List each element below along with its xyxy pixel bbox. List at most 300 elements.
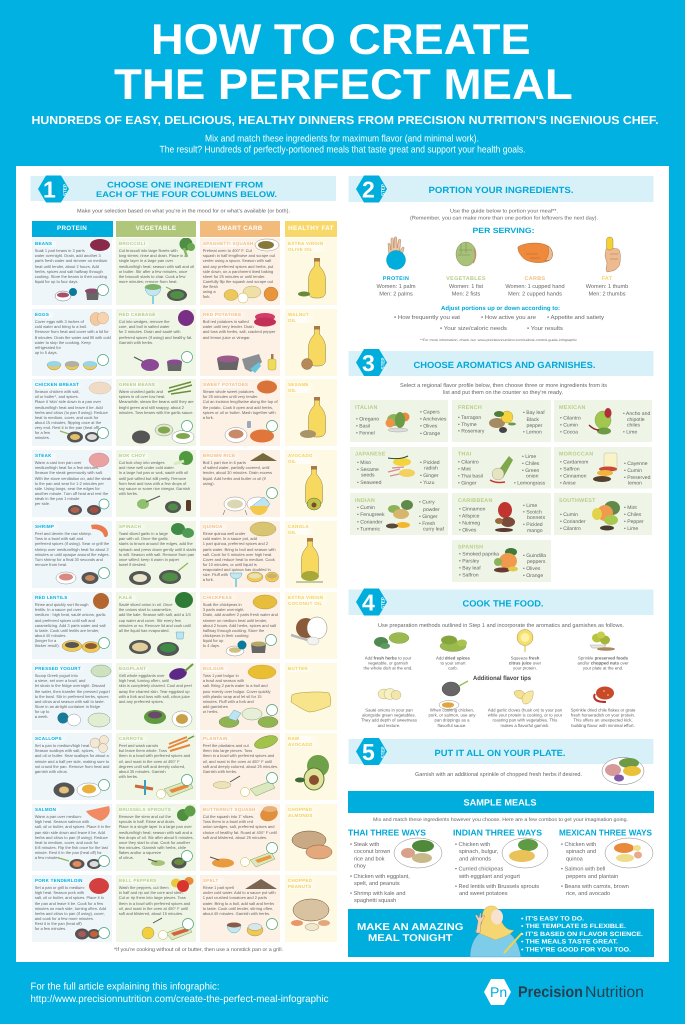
card: sesame oil bbox=[285, 379, 337, 446]
card: pork tenderloin: minutes on each side, turning often. Add bbox=[35, 906, 106, 911]
title bbox=[114, 16, 573, 109]
card: quinoa: Cover and reduce heat to medium. Cook bbox=[203, 557, 275, 562]
step 1 footnote: *If you're cooking without oil or butter, then use a nonstick pan or a grill. bbox=[114, 947, 283, 953]
card: steak: Season the steak generously with salt. bbox=[35, 470, 103, 475]
card: canola oil: OIL bbox=[288, 530, 296, 535]
meal column: Indian three ways: and sweet potatoes bbox=[459, 890, 508, 897]
title: HOW TO CREATE bbox=[151, 16, 531, 64]
column header: smart carb bbox=[200, 221, 280, 237]
step 5 header: PUT IT ALL ON YOUR PLATE. bbox=[434, 748, 566, 758]
card: beans: liquid for up to four days. bbox=[35, 279, 78, 284]
card: shrimp: Peel and devein the raw shrimp. bbox=[35, 531, 92, 536]
intro text: The result? Hundreds of perfectly-portioned meals that taste great and support your health goals. bbox=[160, 144, 526, 156]
flavor box: French: • Rosemary bbox=[458, 428, 485, 434]
column header: healthy fat bbox=[285, 221, 337, 237]
meal column: Indian three ways: • Chicken with bbox=[455, 841, 490, 848]
card: carrots bbox=[116, 733, 196, 800]
card: brussels sprouts: flakes and/or a squeeze bbox=[119, 850, 161, 855]
card: chicken breast: for a few bbox=[35, 430, 50, 435]
card: salmon: minute. Rest it in the pan (heat off) for bbox=[35, 850, 102, 855]
meal column: Thai three ways bbox=[348, 828, 442, 904]
flavor box: French: • Tarragon bbox=[458, 415, 481, 421]
card: red potatoes: and lemon juice or vinegar. bbox=[203, 335, 250, 340]
flavor box: Southwest: SOUTHWEST bbox=[559, 498, 596, 504]
serving amounts: Men: 2 thumbs bbox=[588, 290, 626, 298]
tip: garlic: while your protein is cooking, or to your bbox=[488, 712, 563, 717]
card: plantain: them in a bowl with preferred spices and bbox=[203, 753, 274, 758]
card: quinoa: parts water. Bring to boil and season with bbox=[203, 547, 276, 552]
flavor box: Moroccan: • Cinnamon bbox=[560, 474, 587, 480]
flavor box: Thai bbox=[452, 447, 551, 488]
card: steak: medium/high heat for a few minutes. bbox=[35, 465, 99, 470]
card: red potatoes: RED POTATOES bbox=[203, 312, 241, 317]
meal column: Thai three ways: • Shrimp with kale and bbox=[350, 890, 405, 897]
serving amounts: Women: 1 cupped hand bbox=[505, 283, 565, 290]
card: eggs: refrigerated for bbox=[35, 345, 61, 350]
flavor box: Indian bbox=[350, 493, 448, 535]
flavor box: Thai: THAI bbox=[458, 452, 472, 458]
icon: thumb fat bbox=[605, 237, 620, 272]
step 3 header: STEP bbox=[380, 358, 386, 370]
card: plantain: oil, and roast in the oven at 400° F until bbox=[203, 759, 272, 764]
card: brussels sprouts: few minutes. Garnish with herbs, chile bbox=[119, 845, 186, 850]
card: chickpeas: simmer on medium heat until tender, bbox=[203, 618, 267, 623]
sample meals banner: SAMPLE MEALS bbox=[464, 798, 536, 808]
flavor box: Japanese: JAPANESE bbox=[355, 452, 386, 458]
flavor box: Moroccan bbox=[554, 447, 652, 488]
card: raw avocado: RAW bbox=[288, 736, 299, 741]
card: spelt: SPELT bbox=[203, 878, 219, 883]
card: green beans: Meanwhile, steam the beans until they are bbox=[119, 399, 194, 404]
step 4 header: STEP bbox=[380, 597, 386, 609]
meal column: Thai three ways: spaghetti squash bbox=[354, 897, 396, 904]
card: quinoa: Rinse quinoa well under bbox=[203, 531, 245, 536]
card: red lentils: and preferred spices until soft and bbox=[35, 618, 95, 623]
card: eggplant: high heat, turning often, until bbox=[119, 678, 169, 683]
flavor box: French: Black bbox=[526, 417, 539, 423]
icon: citrus bbox=[517, 630, 533, 652]
column header: healthy fat: HEALTHY FAT bbox=[288, 225, 334, 232]
card: chickpeas: Soak the chickpeas in bbox=[203, 602, 242, 607]
card: butternut squash: choice of healthy fat. Roast at 400° F until bbox=[203, 830, 277, 835]
serving amounts: Men: 2 fists bbox=[452, 290, 480, 298]
card: carrots: degrees until soft and deeply colored, bbox=[119, 764, 185, 769]
card: green beans: spices in oil over low heat. bbox=[119, 394, 165, 399]
flavor box: Caribbean: • Nutmeg bbox=[459, 520, 480, 526]
card: green beans: minutes. Toss beans with the garlic sauce. bbox=[119, 410, 194, 415]
step 2 header: STEP bbox=[380, 184, 386, 196]
card: quinoa: QUINOA bbox=[203, 524, 223, 529]
column header: protein: PROTEIN bbox=[57, 225, 87, 232]
sample meals banner bbox=[348, 791, 654, 813]
card: brown rice bbox=[200, 450, 280, 517]
card: brown rice: liquid. Add herbs and butter or oil (if bbox=[203, 476, 266, 481]
card: plantain: Peel the plantains and cut bbox=[203, 743, 249, 748]
card: broccoli bbox=[116, 238, 196, 305]
card: bell peppers: soft and blistered, about 15 minutes. bbox=[119, 911, 183, 916]
card: kale: add the kale. Season with salt, add a 1/4 bbox=[119, 612, 191, 617]
card: shrimp: Toss in a bowl with salt and bbox=[35, 536, 83, 541]
card: bell peppers: Cut or rip them into large pieces. Toss bbox=[119, 895, 186, 900]
card: spinach: Toast sliced garlic in a large bbox=[119, 531, 168, 536]
card: red potatoes: water until very tender. Drain bbox=[203, 324, 254, 329]
card: scallops: SCALLOPS bbox=[35, 736, 62, 741]
card: plantain: them into large pieces. Toss bbox=[203, 748, 252, 753]
tip: onions: They add depth of sweetness bbox=[361, 718, 417, 722]
card: scallops bbox=[32, 733, 112, 800]
flavor box: Italian: • Olives bbox=[420, 424, 438, 430]
card: shrimp: shrimp over medium/high heat for about 2 bbox=[35, 547, 109, 552]
card: carrots: but leave them whole. Toss bbox=[119, 748, 167, 753]
card: plantain bbox=[200, 733, 280, 800]
card: carrots: them in a bowl with preferred spices and bbox=[119, 753, 190, 758]
flavor box: Mexican: • Lime bbox=[623, 430, 637, 436]
tip: fresh herbs: the whole dish at the end. bbox=[364, 665, 412, 670]
flavor box: Moroccan: MOROCCAN bbox=[559, 452, 593, 458]
card: quinoa: salt. Cook for 5 minutes over high heat. bbox=[203, 552, 272, 557]
flavor box: Indian: • Coriander bbox=[357, 520, 383, 526]
card: canola oil: CANOLA bbox=[288, 524, 309, 529]
adjust portions list: • Appetite and satiety bbox=[547, 314, 604, 321]
card: chicken breast: oil or butter*, and spices. bbox=[35, 394, 79, 399]
serving labels bbox=[383, 276, 613, 282]
adjust portions list: • How active you are bbox=[481, 314, 536, 321]
card: carrots: oil, and roast in the oven at 400° F bbox=[119, 759, 180, 764]
card: chickpeas: halfway through cooking. Store the bbox=[203, 628, 264, 633]
card: spelt: Rinse 1 part spelt bbox=[203, 885, 234, 890]
flavor box: Indian: • Ginger bbox=[419, 514, 438, 520]
step 2 header: PORTION YOUR INGREDIENTS. bbox=[428, 185, 574, 195]
card: pressed yogurt: for up to bbox=[35, 709, 49, 714]
card: bulgur bbox=[200, 663, 280, 730]
card: beans: Soak 1 part beans in 3 parts bbox=[35, 248, 85, 253]
card: pressed yogurt: to the bowl. Stir in preferred herbs, spices bbox=[35, 694, 108, 699]
card: carrots: Peel and wash carrots bbox=[119, 743, 158, 748]
card: plantain: soft and deeply colored, about 25 minutes. bbox=[203, 764, 278, 769]
flavor box: Italian: • Anchovies bbox=[420, 416, 447, 422]
card: brussels sprouts: of citrus. bbox=[119, 855, 134, 860]
tip: citrus juice: your protein. bbox=[513, 665, 537, 670]
flavor box: French: FRENCH bbox=[458, 405, 482, 411]
flavor box: Spanish: SPANISH bbox=[458, 544, 483, 550]
meal column: Indian three ways: with eggplant and yogurt bbox=[458, 873, 520, 880]
card: sweet potatoes: Steam whole sweet potatoes bbox=[203, 389, 254, 394]
card: brown rice: using). bbox=[203, 481, 215, 486]
step 3 intro text: list and put them on the counter so they're ready. bbox=[443, 390, 563, 396]
card: spelt: water. Bring to a boil, add salt and herbs bbox=[203, 901, 274, 906]
card: bok choy: from heat and toss with a few drops of bbox=[119, 481, 186, 486]
card: quinoa bbox=[200, 521, 280, 588]
flavor box: French: pepper bbox=[526, 423, 543, 429]
flavor box: Southwest: • Coriander bbox=[560, 519, 586, 525]
card: chopped almonds: CHOPPED bbox=[288, 807, 312, 812]
card: chicken breast: medium/high heat and leave it be. Add bbox=[35, 405, 103, 410]
card: plantain: Garnish with herbs. bbox=[203, 769, 237, 774]
step 3 intro text: Select a regional flavor profile below, then choose three or more ingredients from its bbox=[400, 383, 607, 389]
card: spelt bbox=[200, 875, 280, 942]
card: pork tenderloin: and cook for a few more minutes. bbox=[35, 916, 94, 921]
card: bok choy: until just wilted but still pretty. Remove bbox=[119, 476, 186, 481]
serving amounts: Men: 2 palms bbox=[379, 290, 413, 298]
flavor box: French: • Thyme bbox=[458, 422, 477, 428]
tip: onions: and texture. bbox=[378, 723, 400, 728]
card: brown rice: BROWN RICE bbox=[203, 453, 235, 458]
card: butternut squash: onion wedges, salt, preferred spices and bbox=[203, 824, 275, 829]
card: butternut squash: Toss them in a bowl with red bbox=[203, 819, 253, 824]
white content panel bbox=[16, 166, 669, 962]
call to action reasons: • IT'S BASED ON FLAVOR SCIENCE. bbox=[521, 931, 643, 938]
card: brussels sprouts: sprouts in half. Rinse and drain. bbox=[119, 819, 175, 824]
card: bulgur: add garnishes bbox=[203, 704, 228, 709]
step 3 header: CHOOSE AROMATICS AND GARNISHES. bbox=[414, 360, 596, 370]
step 2 header bbox=[348, 176, 654, 202]
card: scallops: garnish with citrus. bbox=[35, 769, 68, 774]
flavor box: Japanese: • Sesame bbox=[357, 467, 379, 473]
tip: fresh herbs: vegetable, or garnish bbox=[368, 660, 409, 665]
card: sweet potatoes bbox=[200, 379, 280, 446]
illustration: woman with pen bbox=[470, 906, 522, 957]
panel: sample meals bbox=[348, 791, 654, 904]
card: bell peppers: oil, and roast in the oven at 400° F until bbox=[119, 906, 188, 911]
serving labels: VEGETABLES bbox=[446, 276, 486, 282]
flavor box: French: • Lemon bbox=[523, 430, 542, 436]
flavor box: French bbox=[452, 400, 551, 442]
flavor box: Japanese: seeds bbox=[361, 472, 375, 478]
card: red cabbage: Garnish with herbs. bbox=[119, 340, 153, 345]
card: broccoli: BROCCOLI bbox=[119, 241, 145, 246]
card: bulgur: Toss 1 part bulgur in bbox=[203, 673, 239, 678]
flavor box: Japanese: • Miso bbox=[357, 460, 371, 466]
card: eggs: EGGS bbox=[35, 312, 49, 317]
card: red potatoes: and toss with herbs, salt, cracked pepper bbox=[203, 329, 275, 334]
card: extra virgin coconut oil: EXTRA VIRGIN bbox=[288, 595, 323, 600]
flavor box: Mexican: chipotle bbox=[627, 417, 645, 423]
card: pressed yogurt: the water, then transfer the pressed yogurt bbox=[35, 689, 110, 694]
card: pork tenderloin: Set a pan or grill to medium- bbox=[35, 885, 85, 890]
flavor box: Spanish: peppers bbox=[527, 559, 546, 565]
flavor box: Caribbean: bonnets bbox=[527, 515, 546, 521]
card: spelt: about 40 minutes. Garnish with herbs. bbox=[203, 911, 270, 916]
flavor box: Moroccan: • Cardamom bbox=[560, 460, 588, 466]
card: chopped almonds bbox=[285, 804, 337, 871]
card: beans: herbs, spices and salt halfway through bbox=[35, 269, 103, 274]
tip: fresh herbs: Add fresh herbs to your bbox=[365, 655, 411, 660]
flavor box: Indian: curry leaf bbox=[423, 526, 445, 532]
step 5 header: 5 bbox=[362, 739, 375, 765]
subtitle: HUNDREDS OF EASY, DELICIOUS, HEALTHY DINNERS FROM PRECISION NUTRITION'S INGENIOUS CHEF. bbox=[32, 114, 658, 127]
flavor box: Caribbean: mango bbox=[527, 528, 543, 534]
card: salmon: herbs and citrus to pan (if using). Reduce bbox=[35, 835, 108, 840]
title: THE PERFECT MEAL bbox=[114, 61, 573, 109]
flavor box: Indian: • Turmeric bbox=[357, 526, 380, 532]
card: green beans: bright green and still snappy, about 2 bbox=[119, 405, 184, 410]
card: brussels sprouts: few drops of oil. Stir after about 5 minutes, bbox=[119, 835, 194, 840]
flavor box: Mexican: MEXICAN bbox=[559, 405, 586, 411]
flavor box: Spanish: • Guindilla bbox=[523, 553, 546, 559]
additional flavor tips heading: Additional flavor tips bbox=[473, 675, 532, 682]
card: steak: per side. bbox=[35, 501, 50, 506]
footer article link: http://www.precisionnutrition.com/create-the-perfect-meal-infographic bbox=[30, 994, 328, 1005]
card: quinoa: for 10 minutes, or until liquid is bbox=[203, 562, 257, 567]
card: brussels sprouts: Remove the stem and cut the bbox=[119, 814, 171, 819]
flavor box: Thai: • Lime bbox=[522, 454, 536, 460]
call to action reasons: • THE MEALS TASTE GREAT. bbox=[521, 938, 618, 946]
flavor box: Thai: onion bbox=[526, 474, 539, 480]
icon: garlic bbox=[514, 690, 533, 704]
card: red cabbage: core, and boil in salted water bbox=[119, 324, 170, 329]
tip: pan sauce: pork, or salmon, use any bbox=[428, 712, 476, 717]
card: chopped almonds: ALMONDS bbox=[288, 813, 313, 818]
card: eggplant: Grill whole eggplants over bbox=[119, 673, 165, 678]
meal column: Indian three ways: INDIAN THREE WAYS bbox=[453, 828, 542, 838]
card: spinach: to wilt. Season with salt. Remove from pan bbox=[119, 552, 194, 557]
card: sweet potatoes: SWEET POTATOES bbox=[203, 382, 248, 387]
card: salmon: 6-8 minutes. Flip the fish once for the last bbox=[35, 845, 108, 850]
tip: garlic: Add garlic cloves (husk on) to your pan bbox=[488, 707, 563, 712]
card: spinach: spinach and press down gently until it starts bbox=[119, 547, 196, 552]
flavor box: Thai: • Ginger bbox=[458, 480, 477, 486]
card: pressed yogurt: PRESSED YOGURT bbox=[35, 666, 81, 671]
tip: onions: Sauté onions in your pan bbox=[365, 707, 413, 712]
card: walnut oil: WALNUT bbox=[288, 312, 309, 317]
card: butter: BUTTER bbox=[288, 666, 308, 671]
card: chicken breast: very end. Rest it in the pan (heat off) bbox=[35, 425, 99, 430]
card: broccoli: more minutes; remove from heat. bbox=[119, 279, 178, 284]
flavor box: Spanish: • Smoked paprika bbox=[459, 552, 499, 558]
card: pressed yogurt: Store in an airtight container in fridge bbox=[35, 704, 100, 709]
card: red lentils: medium - high heat, sauté onions, garlic bbox=[35, 612, 106, 617]
card: carrots: about 35 minutes. Garnish bbox=[119, 769, 166, 774]
card: spelt: to taste. Cook until tender, stirring often, bbox=[203, 906, 273, 911]
step 4 intro text: Use preparation methods outlined in Step 1 and incorporate the aromatics and garnishes as follows. bbox=[378, 623, 624, 629]
meal column: Thai three ways: choy bbox=[354, 862, 366, 870]
column header: smart carb: SMART CARB bbox=[217, 225, 263, 232]
flavor box: Japanese: • Yuzu bbox=[420, 480, 435, 486]
per serving heading: PER SERVING: bbox=[472, 226, 534, 235]
card: spaghetti squash: center using a spoon. Season with salt bbox=[203, 258, 271, 263]
flavor box: Mexican bbox=[554, 400, 652, 442]
meal column: Thai three ways: • Steak with bbox=[350, 841, 379, 848]
step 1 header bbox=[30, 176, 336, 202]
flavor box: Italian: • Fennel bbox=[356, 430, 375, 436]
flavor box: Indian: • Curry bbox=[419, 500, 435, 506]
card: bulgur: a bowl and season with bbox=[203, 678, 244, 683]
card: extra virgin olive oil bbox=[285, 238, 337, 305]
flavor box: Mexican: • Cocoa bbox=[560, 430, 578, 436]
card: shrimp bbox=[32, 521, 112, 588]
card: bulgur: BULGUR bbox=[203, 666, 224, 671]
card: kale: all the liquid has evaporated. bbox=[119, 628, 170, 633]
card: red cabbage: Cut into wedges, remove the bbox=[119, 319, 170, 324]
flavor box: Italian: • Oregano bbox=[356, 416, 379, 422]
card: salmon bbox=[32, 804, 112, 871]
adjust portions list bbox=[394, 305, 604, 332]
tip: onions: alongside green vegetables. bbox=[362, 712, 416, 717]
card: broccoli: Cut broccoli into large florets with bbox=[119, 248, 178, 253]
card: sesame oil: SESAME bbox=[288, 382, 309, 387]
card: red lentils: about 40 minutes. bbox=[35, 633, 66, 638]
flavor box: Italian: ITALIAN bbox=[355, 405, 378, 411]
flavor box: Thai: • Mint bbox=[458, 466, 471, 472]
card: pork tenderloin: PORK TENDERLOIN bbox=[35, 878, 83, 883]
call to action reasons: • IT'S EASY TO DO. bbox=[521, 915, 584, 922]
card: spaghetti squash: fork. bbox=[203, 294, 210, 299]
icon: pan drippings bbox=[439, 681, 468, 710]
tip: garlic: makes a flavorful garnish. bbox=[501, 723, 549, 728]
sample meals intro: Mix and match these ingredients however you choose. Here are a few combos to get your imagination going. bbox=[373, 817, 628, 823]
card: red lentils: lentils. In a sauce pot over bbox=[35, 607, 81, 612]
card: avocado oil: OIL bbox=[288, 459, 296, 464]
card: steak: to the pan and sear for 1-2 minutes per bbox=[35, 481, 104, 486]
card: shrimp: Turn shrimp for a final 30 seconds and bbox=[35, 557, 103, 562]
card: carrots: with herbs. bbox=[119, 774, 138, 779]
card: broccoli: medium/high heat; season with salt and oil bbox=[119, 264, 194, 269]
call to action heading bbox=[357, 922, 463, 944]
card: beans: parts fresh water and simmer on medium bbox=[35, 258, 107, 263]
step 4 header: COOK THE FOOD. bbox=[462, 598, 544, 608]
card: broccoli: or butter. Stir after a few minutes, once bbox=[119, 269, 187, 274]
card: salmon: pan skin side down and leave it be. Add bbox=[35, 830, 105, 835]
card: carrots: CARROTS bbox=[119, 736, 143, 741]
panel: step 3 aromatics and garnishes bbox=[348, 349, 654, 582]
flavor box: Spanish: • Saffron bbox=[459, 572, 479, 578]
tip: citrus juice: citrus juice over bbox=[509, 660, 541, 665]
icon: chili flakes bbox=[594, 686, 614, 702]
card: eggplant: skin is completely charred. Cool and peel bbox=[119, 683, 192, 688]
card: bell peppers: them in a bowl with preferred spices and bbox=[119, 901, 190, 906]
card: steak bbox=[32, 450, 112, 517]
card: pork tenderloin: high heat. Season pork with bbox=[35, 890, 84, 895]
meal column: Indian three ways bbox=[453, 828, 548, 897]
card: extra virgin coconut oil bbox=[285, 592, 337, 659]
panel: step 2 portion your ingredients bbox=[348, 176, 654, 342]
card: spaghetti squash: squash in half lengthwise and scrape out bbox=[203, 253, 275, 258]
panel: step 5 put it on your plate bbox=[348, 738, 654, 784]
tip: preserved foods: Sprinkle preserved foods bbox=[578, 655, 628, 660]
card: bell peppers: in half and rip out the core and stem. bbox=[119, 890, 184, 895]
meal column: Mexican three ways: • Chicken with bbox=[561, 841, 596, 848]
flavor box: Mexican: • Cilantro bbox=[560, 416, 581, 422]
flavor box: Indian: INDIAN bbox=[355, 498, 375, 504]
tip: chili flakes: Sprinkle dried chile flakes or grate bbox=[571, 707, 636, 712]
card: butter bbox=[285, 663, 337, 730]
card: raw avocado bbox=[285, 733, 337, 800]
card: chicken breast: herbs and citrus (to pan if using). Reduce bbox=[35, 410, 108, 415]
card: spelt: under cold water. Add to a sauce pot with bbox=[203, 890, 276, 895]
tip: preserved foods: your plate at the end. bbox=[583, 665, 623, 670]
tip: citrus juice: Squeeze fresh bbox=[511, 655, 539, 660]
card: kale bbox=[116, 592, 196, 659]
card: salmon: a few minutes. bbox=[35, 855, 60, 860]
card: eggs: Cover eggs with 3 inches of bbox=[35, 319, 84, 324]
card: pork tenderloin: the pan and leave it be. Cook for a few bbox=[35, 901, 103, 906]
meal column: Thai three ways: • Chicken with eggplant, bbox=[350, 873, 410, 880]
card: brown rice: tender, about 30 minutes. Drain excess bbox=[203, 470, 272, 475]
meal column: Mexican three ways: • Salmon with bell bbox=[561, 866, 605, 872]
card: walnut oil: OIL bbox=[288, 318, 296, 323]
step 4 header: 4 bbox=[362, 590, 375, 616]
flavor box: Mexican: • Cumin bbox=[560, 422, 578, 428]
adjust portions list: • How frequently you eat bbox=[394, 314, 460, 321]
card: scallops: minute and a half per side, making sure to bbox=[35, 759, 109, 764]
card: extra virgin olive oil: OLIVE OIL bbox=[288, 247, 313, 252]
flavor box: Moroccan: • Preserved bbox=[624, 475, 651, 481]
card: scallops: and oil or butter. Sear scallops for about a bbox=[35, 753, 109, 758]
flavor box: Caribbean: • Olives bbox=[459, 528, 477, 534]
flavor box: Caribbean: • Pickled bbox=[523, 522, 543, 528]
flavor box: Japanese bbox=[350, 447, 448, 488]
card: bulgur: or herbs. bbox=[203, 709, 218, 714]
